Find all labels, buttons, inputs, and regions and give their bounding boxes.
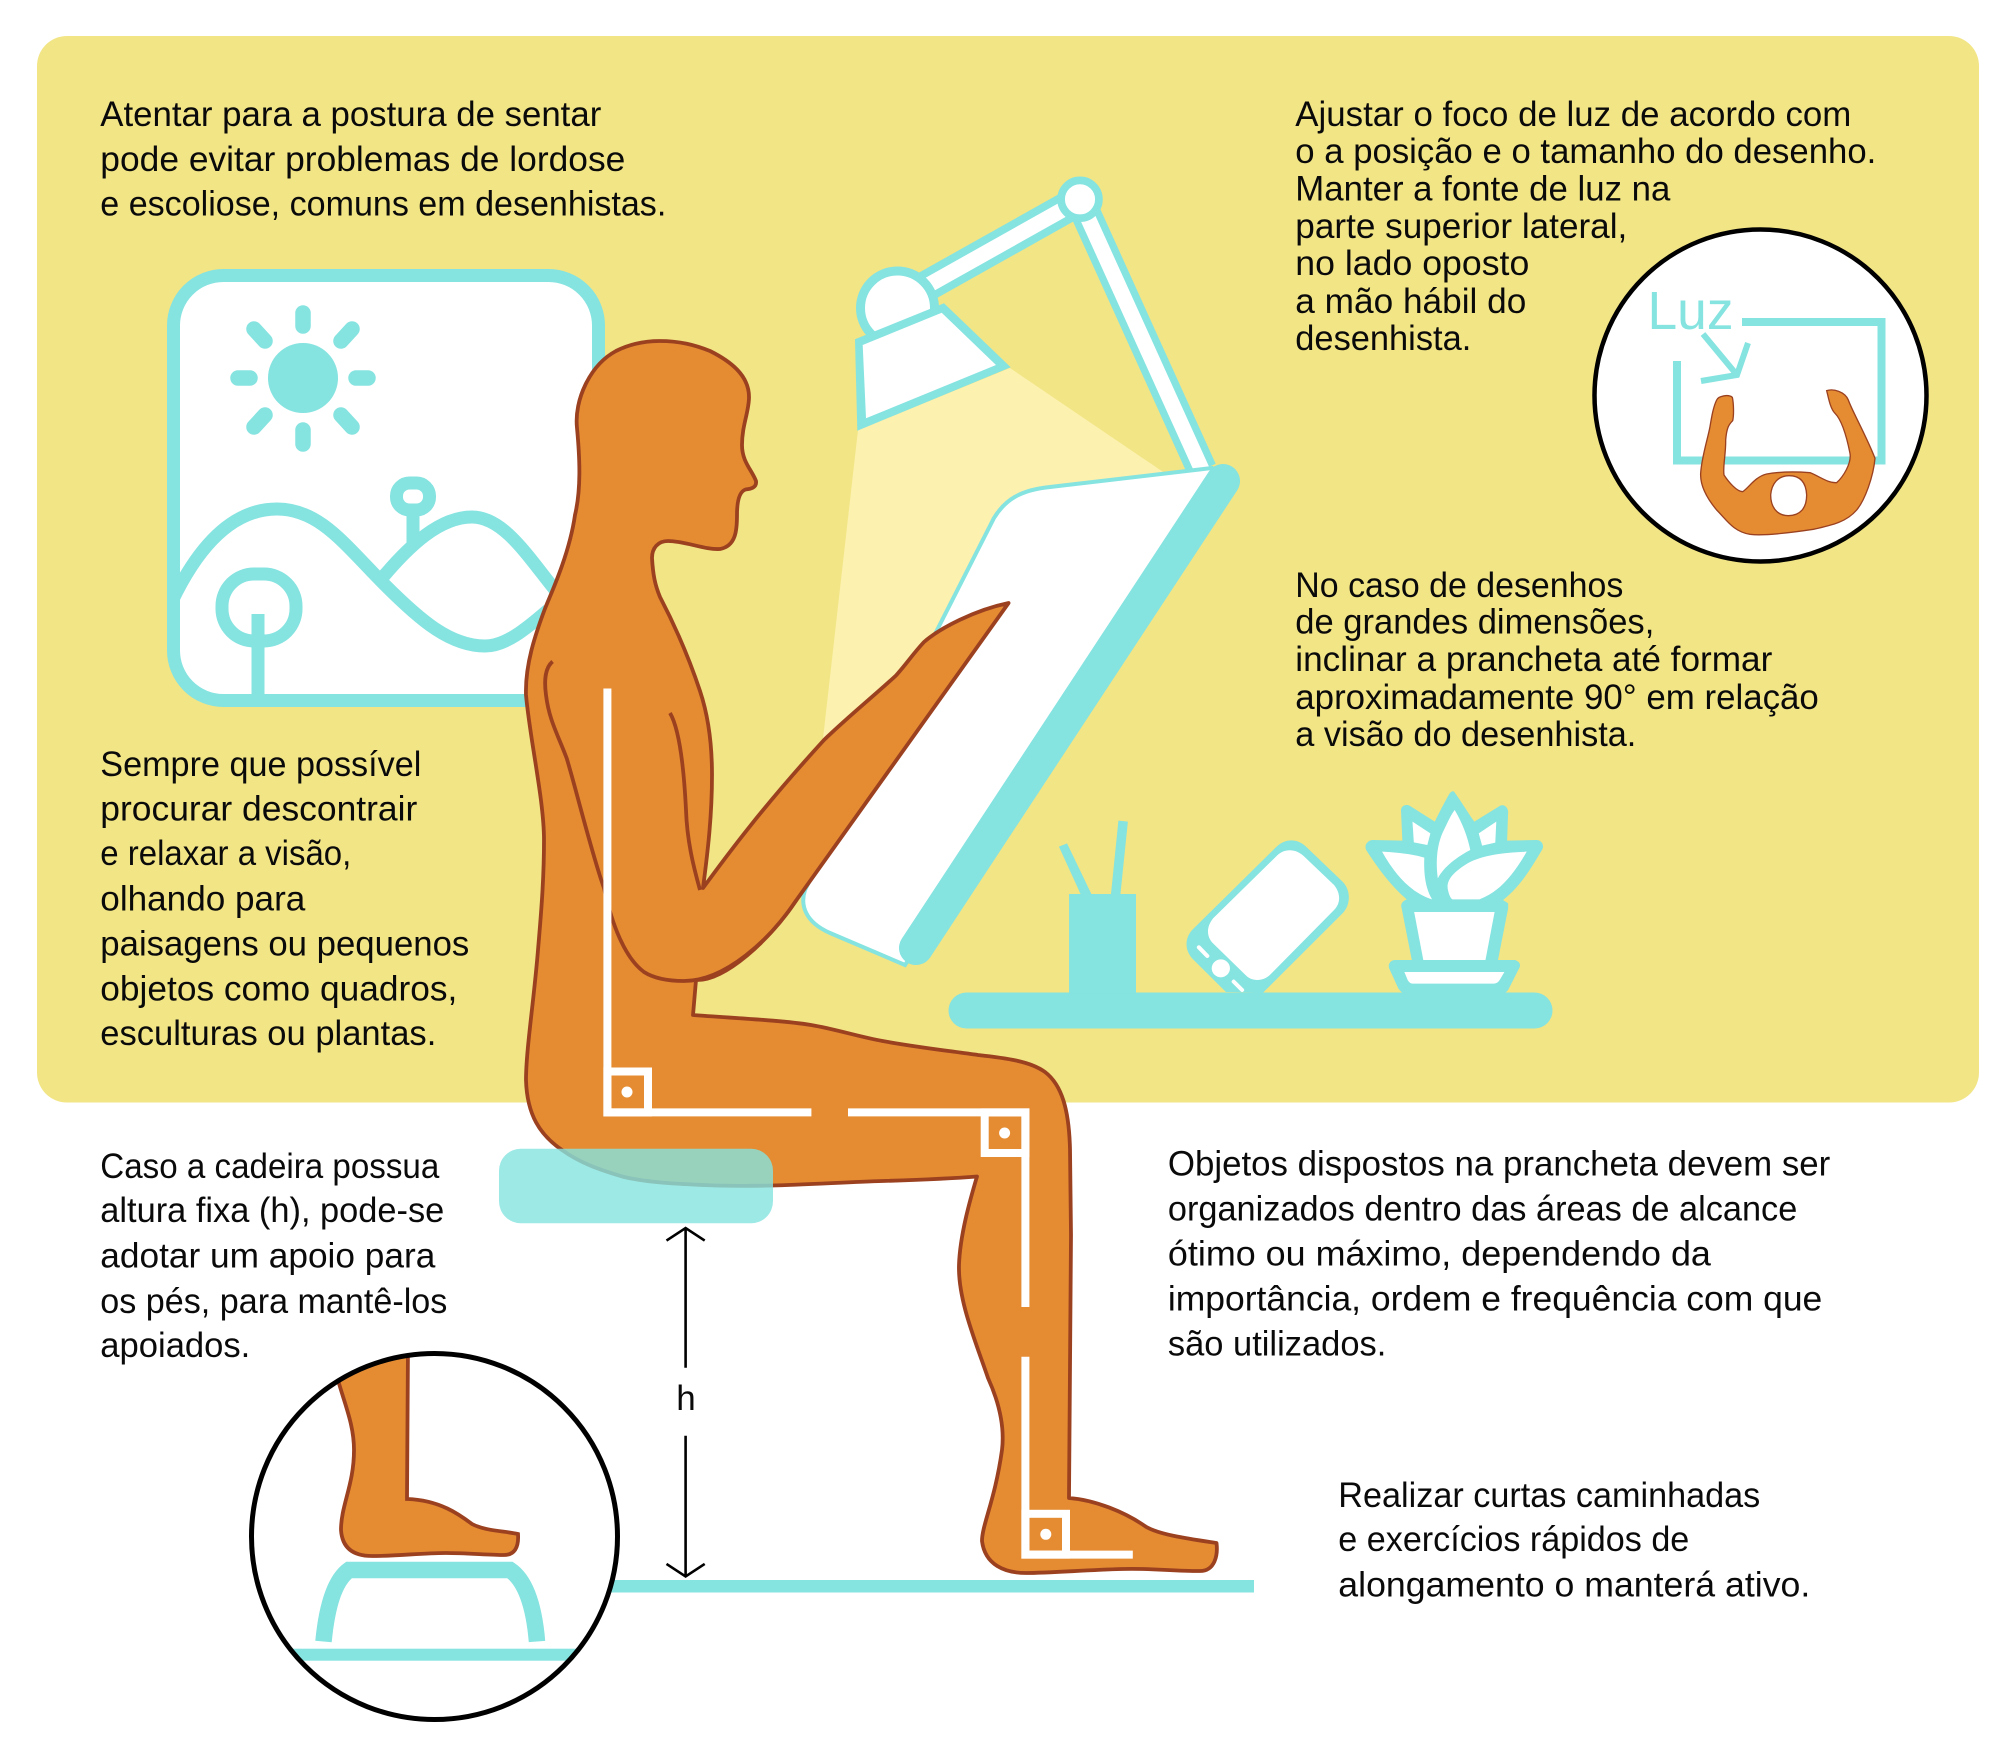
foot [330,1345,518,1556]
icon: pencil cup [1059,821,1136,993]
icon: potted plant [1365,791,1543,996]
text: footrest: apoiados. [100,1326,250,1365]
text: sitting posture: Atentar para a postura de sentar [100,95,602,134]
text: short walks: e exercícios rápidos de [1338,1520,1689,1559]
text: adjust light: parte superior lateral, [1295,207,1627,246]
arm contour lines [545,662,796,981]
text: adjust light: no lado oposto [1295,244,1529,283]
label: h: h [676,1379,696,1418]
seated figure [526,341,1217,1573]
text: adjust light: a mão hábil do [1295,282,1526,321]
right-angle markers [607,688,1133,1555]
text: adjust light [1295,95,1876,358]
top-view body [1701,390,1875,535]
arrow: light direction [1701,334,1748,381]
text: relax vision: procurar descontrair [100,790,418,828]
text: adjust light: o a posição e o tamanho do desenho. [1295,132,1876,171]
panel: yellow background [37,36,1979,1102]
text: objects on board: importância, ordem e frequência com que [1168,1280,1822,1318]
text: relax vision: esculturas ou plantas. [100,1014,436,1053]
text: adjust light: desenhista. [1295,319,1471,358]
shelf with objects [948,791,1552,1028]
floor line [600,1580,1254,1592]
text: large drawings [1295,566,1819,754]
text: large drawings: inclinar a prancheta até formar [1295,640,1773,679]
inset: foot on footrest [250,1345,620,1720]
text: relax vision: Sempre que possível [100,745,421,784]
text: footrest: altura fixa (h), pode-se [100,1191,444,1230]
text: footrest: adotar um apoio para [100,1236,436,1276]
text: relax vision: olhando para [100,880,306,918]
text: large drawings: aproximadamente 90° em relação [1295,678,1819,717]
chair seat [499,1149,773,1223]
footrest [324,1570,537,1642]
text: sitting posture: pode evitar problemas de lordose [100,140,625,179]
text: adjust light: Manter a fonte de luz na [1295,170,1671,208]
text: short walks: alongamento o manterá ativo. [1338,1566,1810,1604]
label: Luz: Luz [1648,281,1734,341]
drawing board [803,468,1230,965]
text: objects on board: ótimo ou máximo, dependendo da [1168,1234,1711,1274]
light cone [820,368,1172,765]
icon: phone [1187,840,1349,993]
icon: sun [238,313,368,444]
inset: top view of light [1594,230,1926,562]
text: relax vision: e relaxar a visão, [100,834,351,873]
text: short walks: Realizar curtas caminhadas [1338,1476,1760,1515]
icon: landscape window [168,276,598,701]
desk outline [1677,322,1882,460]
text: objects on board: organizados dentro das áreas de alcance [1168,1190,1797,1228]
text: sitting posture: e escoliose, comuns em desenhistas. [100,184,666,224]
text: relax vision [100,745,469,1053]
text: footrest: os pés, para mantê-los [100,1282,447,1321]
text: footrest [100,1147,447,1365]
text: large drawings: de grandes dimensões, [1295,602,1654,642]
text: objects on board [1168,1145,1831,1364]
text: large drawings: No caso de desenhos [1295,566,1623,605]
text: sitting posture [100,95,666,224]
text: adjust light: Ajustar o foco de luz de acordo com [1295,95,1851,134]
text: footrest: Caso a cadeira possua [100,1147,440,1186]
text: large drawings: a visão do desenhista. [1295,715,1636,754]
text: objects on board: são utilizados. [1168,1324,1386,1364]
text: relax vision: objetos como quadros, [100,970,457,1008]
icon: desk lamp [855,180,1202,470]
text: short walks [1338,1476,1810,1604]
text: relax vision: paisagens ou pequenos [100,924,469,964]
text: objects on board: Objetos dispostos na prancheta devem ser [1168,1145,1831,1184]
arrow: height h [666,1228,705,1576]
icon: hills and trees [168,483,560,701]
